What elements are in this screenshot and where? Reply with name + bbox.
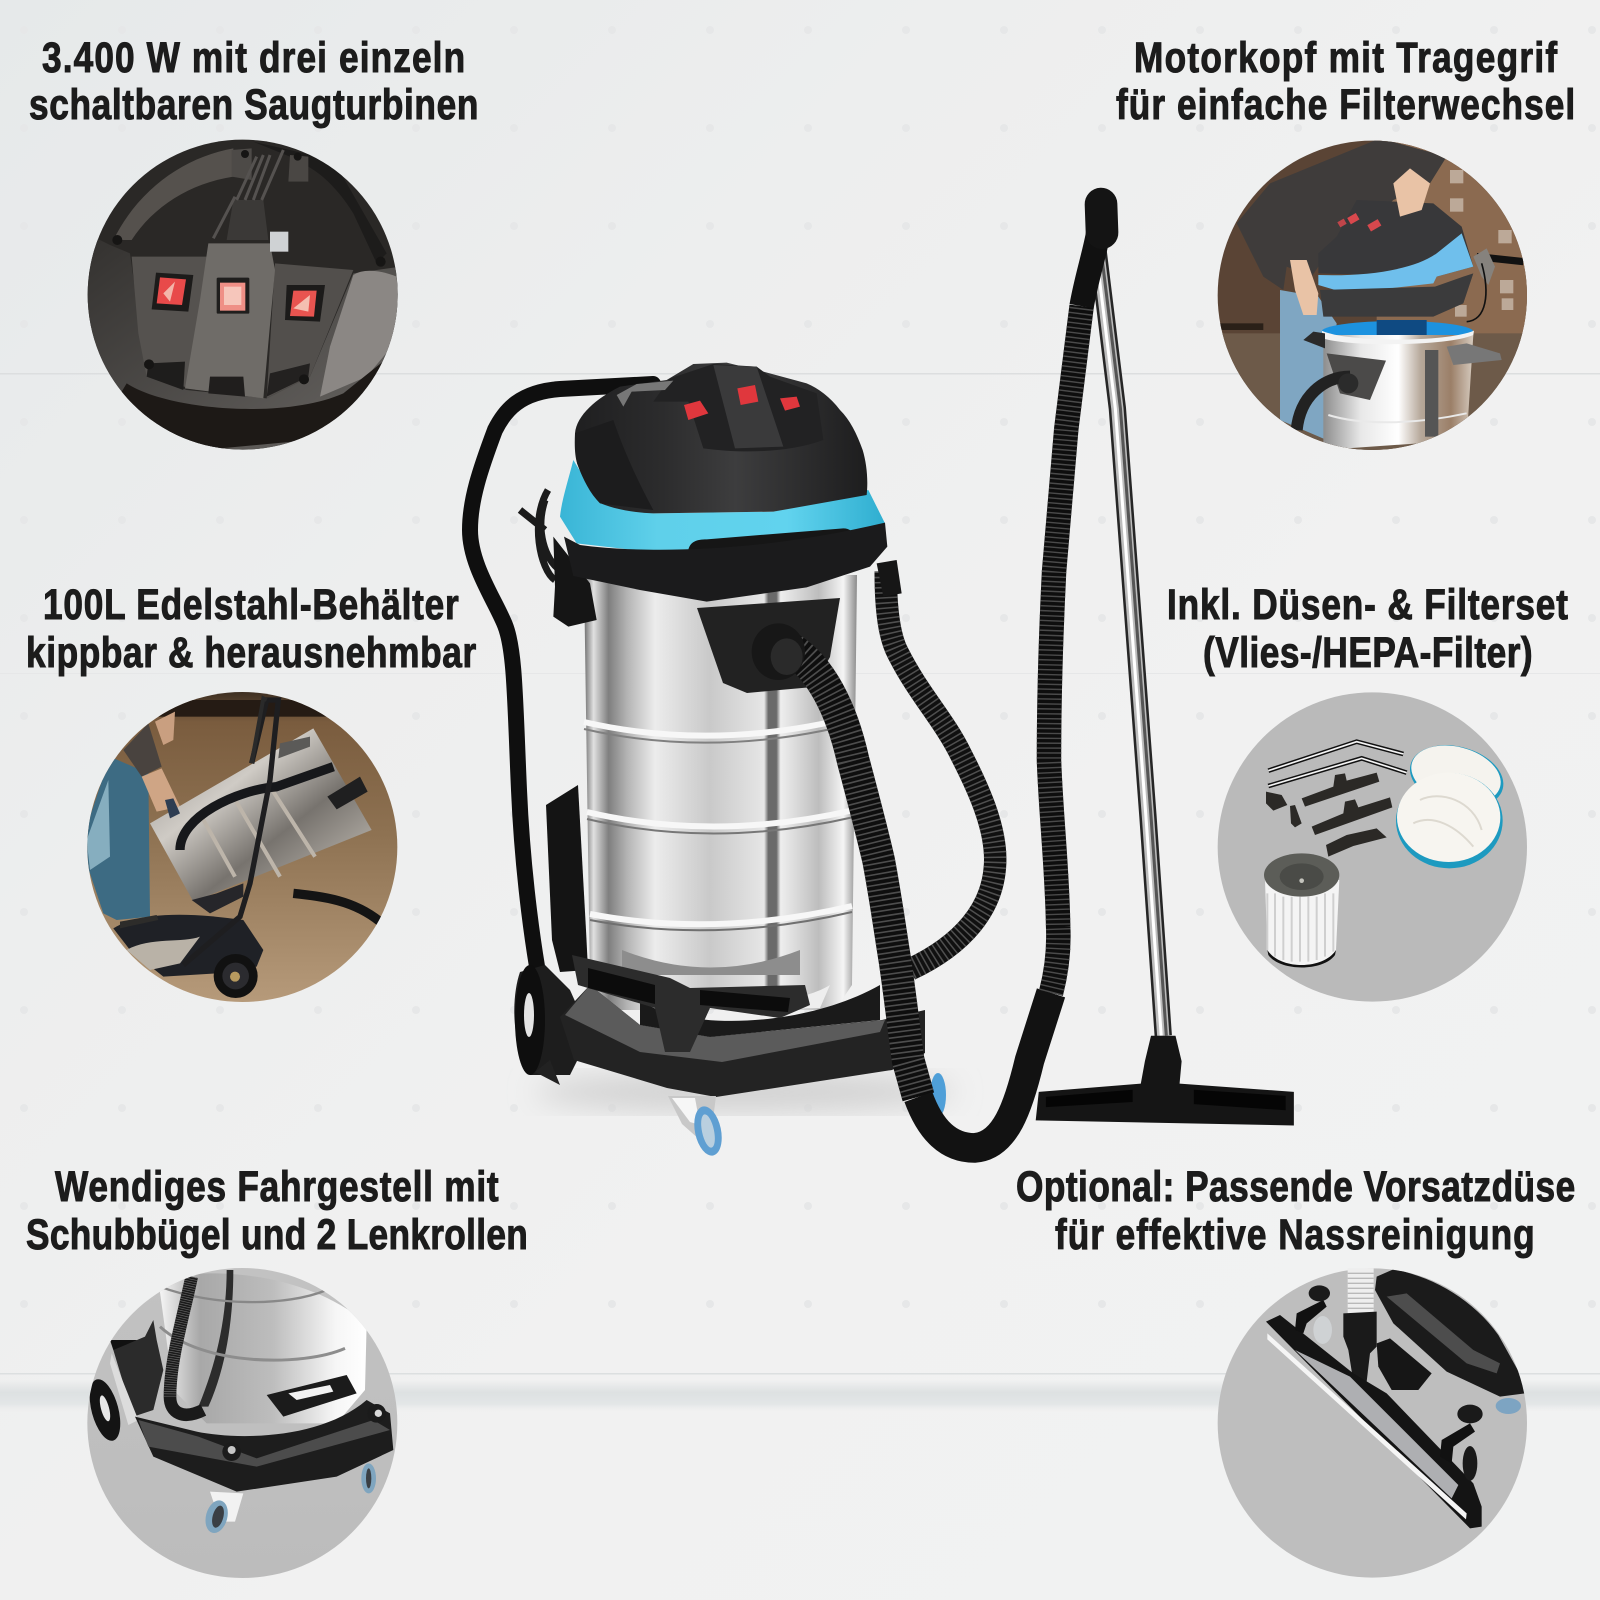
right hose fitting xyxy=(877,560,902,597)
circle: chassis and castors xyxy=(83,1263,403,1583)
rear hose xyxy=(886,571,995,969)
circle: wet cleaning attachment xyxy=(1218,1268,1527,1578)
lid panel xyxy=(653,364,823,451)
wheel right xyxy=(1463,1446,1477,1481)
squeegee blade xyxy=(1267,1333,1467,1519)
heading: 3.400 W: schaltbaren Saugturbinen xyxy=(29,81,478,129)
main suction hose xyxy=(784,204,1102,1148)
heading: Motorkopf: für einfache Filterwechsel xyxy=(1116,81,1575,129)
heading: 3.400 W xyxy=(29,34,478,129)
squeegee bar xyxy=(1266,1315,1482,1528)
grey backdrop xyxy=(1218,1268,1527,1578)
floor shadow xyxy=(535,1072,955,1112)
circle: tilting tank xyxy=(80,690,403,1010)
power cable and plug xyxy=(520,490,560,580)
extension tubes xyxy=(1268,742,1407,786)
wheel left xyxy=(1313,1316,1332,1344)
crevice tool xyxy=(546,785,588,972)
grey backdrop xyxy=(1218,692,1527,1002)
centre ridge xyxy=(713,365,783,448)
HEPA filter xyxy=(1264,853,1339,967)
filter bags xyxy=(1396,735,1510,868)
push handle xyxy=(470,384,653,1040)
heading: 100L Edelstahl: 100L Edelstahl-Behälter xyxy=(43,581,459,629)
black machine base xyxy=(1375,1269,1525,1414)
vent slot xyxy=(688,528,855,550)
heading: Düsen- und Filterset: (Vlies-/HEPA-Filter) xyxy=(1203,629,1533,677)
heading: Vorsatzdüse xyxy=(1016,1163,1575,1259)
wheel bracket left xyxy=(1295,1300,1327,1333)
circle: lifting the motor head xyxy=(1213,137,1533,457)
knob right xyxy=(1457,1405,1483,1423)
heading: 100L Edelstahl: kippbar & herausnehmbar xyxy=(26,629,476,677)
carry handle grey xyxy=(617,381,673,407)
clamp xyxy=(1377,1338,1432,1390)
heading: Motorkopf xyxy=(1116,34,1575,129)
heading: Fahrgestell xyxy=(26,1163,528,1259)
heading: 3.400 W: 3.400 W mit drei einzeln xyxy=(42,34,465,82)
heading: Fahrgestell: Schubbügel und 2 Lenkrollen xyxy=(26,1211,528,1259)
red switches xyxy=(684,401,708,420)
heading: 100L Edelstahl xyxy=(26,581,476,677)
hose pipe xyxy=(1348,1268,1374,1315)
suction inlet xyxy=(697,598,840,693)
circle: switch panel xyxy=(83,133,403,467)
upper head with collar, blue band and lid xyxy=(553,363,902,627)
floor nozzle xyxy=(1036,1036,1294,1126)
lid xyxy=(575,363,867,513)
heading: Düsen- und Filterset xyxy=(1167,581,1568,677)
nozzles xyxy=(1266,773,1392,857)
heading: Vorsatzdüse: Optional: Passende Vorsatzdüse xyxy=(1016,1163,1575,1211)
circle: accessories set xyxy=(1218,692,1527,1002)
chrome wand xyxy=(1096,250,1166,1036)
heading: Motorkopf: Motorkopf mit Tragegrif xyxy=(1134,34,1558,82)
heading: Düsen- und Filterset: Inkl. Düsen- & Filterset xyxy=(1167,581,1568,629)
stainless steel tank xyxy=(584,575,857,1010)
heading: Vorsatzdüse: für effektive Nassreinigung xyxy=(1055,1211,1535,1259)
black collar xyxy=(564,523,887,602)
cable hook xyxy=(553,537,597,627)
hose connector xyxy=(752,623,805,680)
chassis, tray and wheels xyxy=(514,955,946,1158)
main product: wet and dry vacuum xyxy=(470,204,1294,1158)
wheel bracket right xyxy=(1440,1423,1475,1463)
blue band xyxy=(560,460,885,557)
hose collar xyxy=(1343,1312,1377,1382)
squeegee plate xyxy=(1295,1350,1458,1498)
heading: Fahrgestell: Wendiges Fahrgestell mit xyxy=(55,1163,499,1211)
knob left xyxy=(1309,1285,1330,1301)
